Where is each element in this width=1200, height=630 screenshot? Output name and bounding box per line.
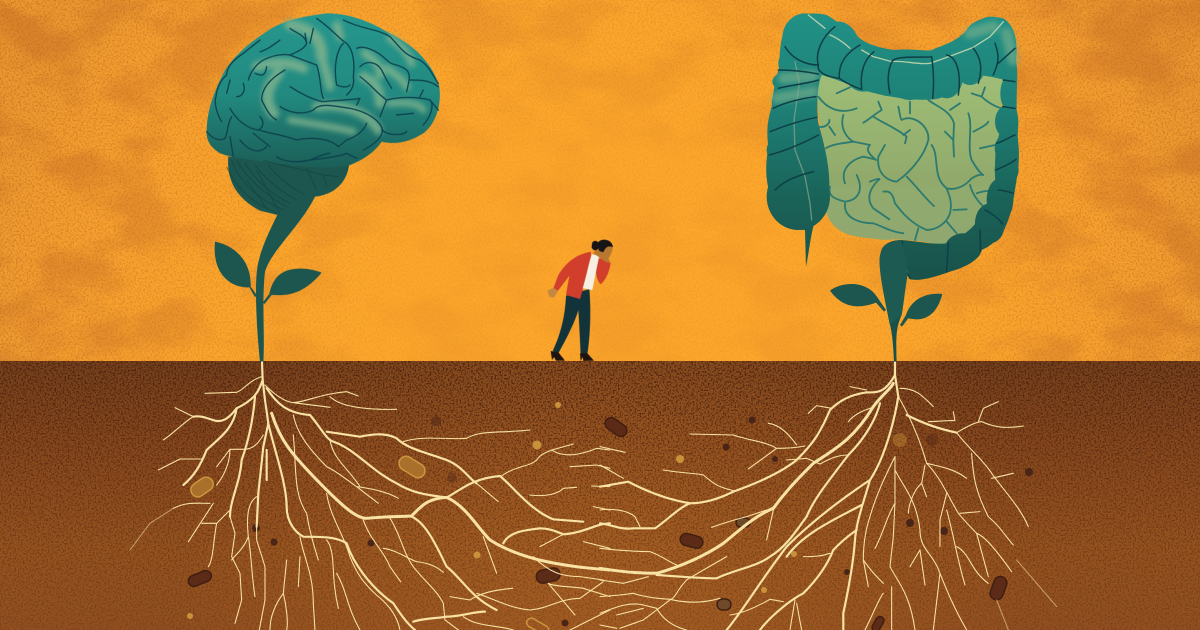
small intestine — [817, 75, 1003, 246]
right leaf — [263, 269, 322, 304]
soil ground — [0, 361, 1200, 630]
woman looking down — [547, 240, 613, 361]
jacket — [553, 252, 611, 299]
legs — [553, 289, 590, 354]
medium roots — [600, 362, 957, 630]
colon highlight — [777, 15, 1013, 220]
head — [593, 243, 613, 263]
gut plant — [766, 13, 1019, 362]
left leaf — [830, 284, 886, 312]
fine roots — [600, 387, 1057, 630]
fine roots — [130, 377, 610, 630]
hand — [547, 288, 558, 298]
thick root to the brain — [600, 383, 893, 573]
shirt — [583, 254, 599, 290]
shoes — [551, 351, 594, 361]
brain folds — [207, 18, 438, 162]
medium roots — [183, 362, 610, 630]
stem and cerebellum — [228, 157, 349, 362]
cerebellum ridges — [227, 160, 338, 213]
tail fill of stem — [880, 241, 908, 325]
cerebrum — [207, 13, 440, 168]
roots under the gut plant — [600, 362, 1057, 630]
hair — [592, 240, 613, 252]
microbes in soil — [187, 402, 1033, 630]
small intestine folds — [818, 87, 1002, 240]
thick root to the gut — [272, 413, 610, 570]
left leaf — [215, 242, 257, 297]
right leaf — [900, 294, 942, 327]
colon segment lines — [769, 27, 1016, 278]
roots under the brain plant — [130, 362, 610, 630]
brain plant — [207, 13, 440, 362]
background: orange sky — [0, 0, 1200, 361]
brain highlights — [257, 25, 423, 132]
colon — [766, 13, 1019, 362]
